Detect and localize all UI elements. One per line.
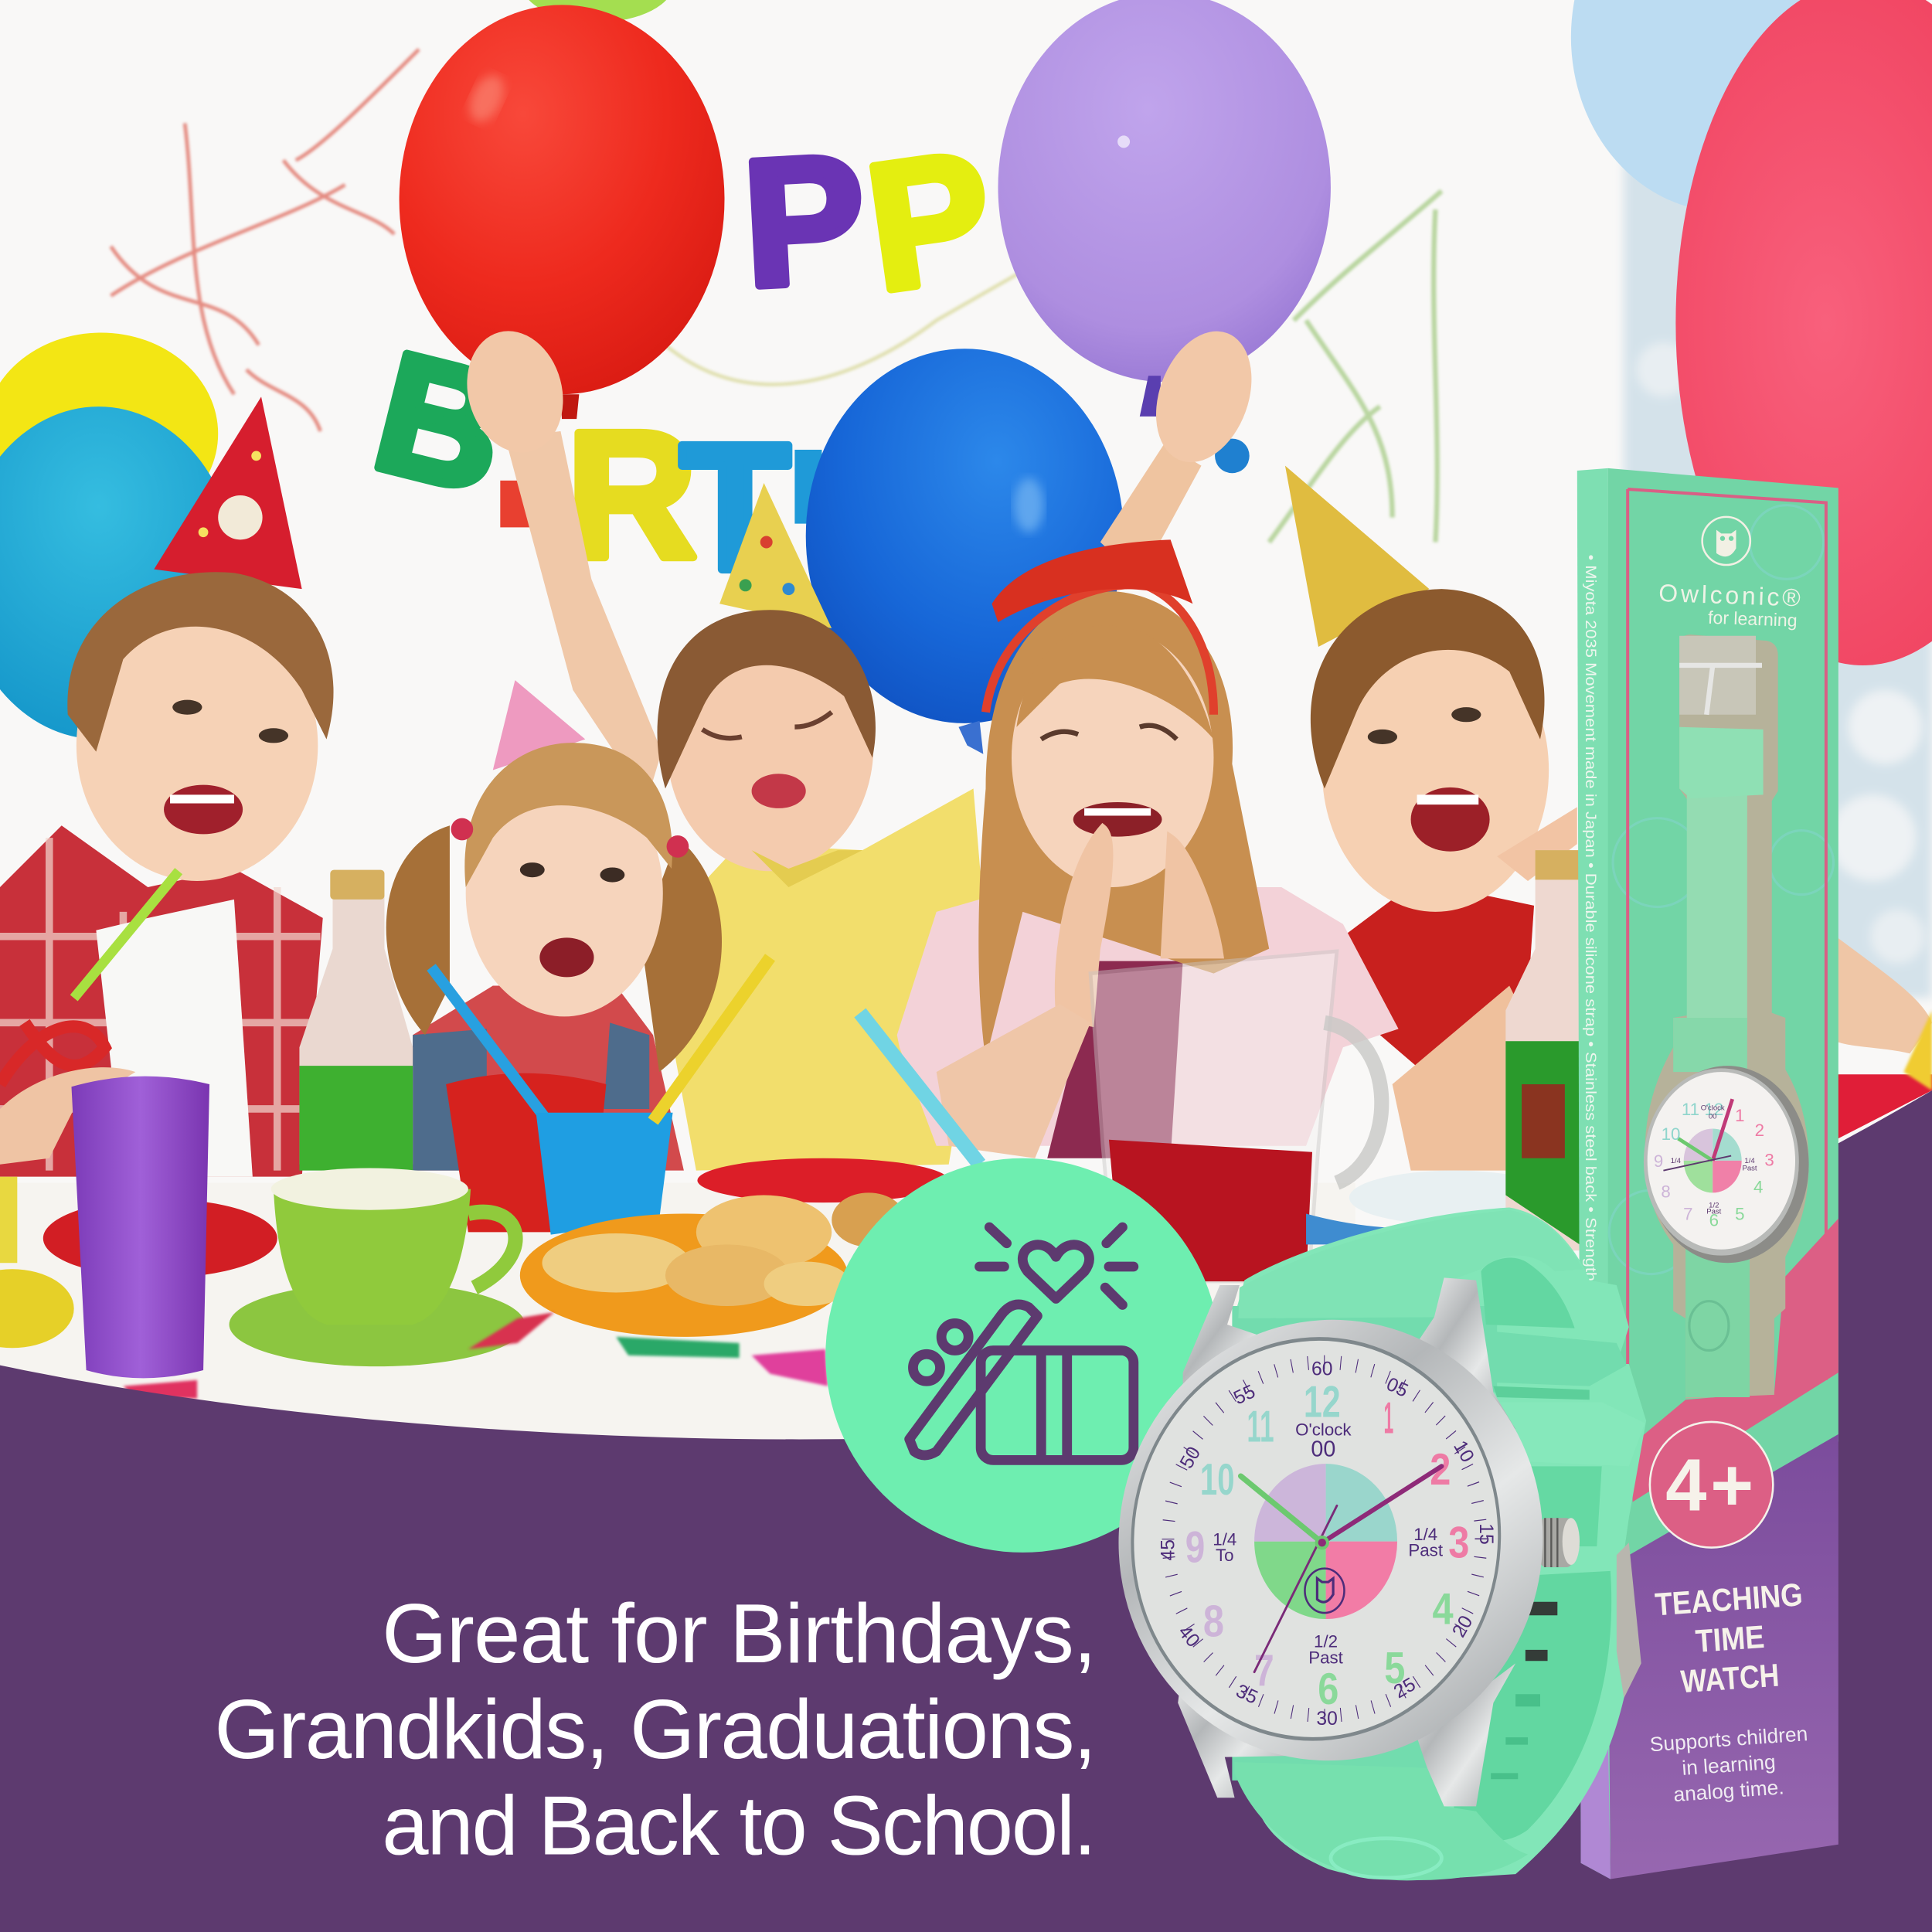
faint pattern — [1609, 505, 1833, 1274]
photo background: party room wall — [0, 0, 1932, 1380]
straw: green — [74, 871, 179, 998]
balloon letters HAPPY BIRTHDAY: R — [566, 395, 697, 596]
spine lower purple — [1581, 1725, 1611, 1879]
orange plate with cookies — [520, 1192, 906, 1337]
balloon: blue — [806, 349, 1124, 754]
red plate edge right — [1836, 1074, 1932, 1140]
red plate at back — [697, 1158, 949, 1202]
star decoration — [1903, 1010, 1932, 1090]
minute numbers: 20 — [1448, 1612, 1478, 1641]
straw: blue left — [431, 968, 622, 1219]
small watch in box: Past — [1706, 1207, 1722, 1216]
minute numbers — [1158, 1359, 1496, 1730]
small watch in box: 00 — [1709, 1113, 1717, 1121]
kid: girl with crown — [897, 539, 1399, 1158]
box title: TEACHING — [1654, 1576, 1804, 1622]
balloon: lavender — [998, 0, 1331, 417]
fist left — [454, 320, 577, 464]
green saucer — [230, 1283, 525, 1366]
minute numbers: 10 — [1449, 1437, 1478, 1466]
quadrant disc — [1254, 1464, 1397, 1619]
box title: WATCH — [1679, 1657, 1781, 1699]
hour numbers: 11 — [1247, 1402, 1274, 1451]
small watch in box: 1/2 — [1709, 1202, 1719, 1210]
purple wave background — [0, 1090, 1932, 1932]
kid: left girl with pigtails — [386, 743, 722, 1171]
small watch in box: 10 — [1662, 1124, 1680, 1144]
dial — [1114, 1323, 1518, 1755]
hour numbers: 8 — [1203, 1597, 1224, 1646]
kid: right boy in red shirt — [1311, 589, 1932, 1171]
dial labels: O'clock — [1295, 1420, 1352, 1439]
glass jug with red juice — [1090, 951, 1382, 1281]
mint circle with gift icon — [825, 1158, 1219, 1553]
small strap — [1673, 636, 1764, 1397]
hour numbers: 2 — [1430, 1445, 1451, 1495]
small watch in box: 2 — [1755, 1121, 1764, 1140]
small watch in box: 8 — [1661, 1182, 1671, 1202]
small watch in box: Past — [1742, 1165, 1757, 1173]
small watch in box — [1644, 1066, 1809, 1263]
cup at right — [1306, 1171, 1559, 1244]
arm of right hand girl raised — [1100, 444, 1202, 579]
dial labels: 1/4 — [1413, 1525, 1437, 1544]
headline: Grandkids, Graduations, — [214, 1682, 1097, 1776]
minute numbers: 45 — [1158, 1539, 1179, 1560]
small watch in box: 11 — [1682, 1100, 1699, 1119]
hour numbers: 9 — [1185, 1523, 1205, 1573]
box title: TIME — [1694, 1618, 1766, 1659]
crown — [1532, 1518, 1580, 1567]
watch lugs — [1178, 1277, 1515, 1806]
buckle — [1617, 1543, 1641, 1698]
balloon: light blue top right — [1571, 0, 1879, 212]
box description: Supports children — [1649, 1722, 1808, 1756]
headline: and Back to School. — [382, 1779, 1097, 1872]
4+ badge: 4+ — [1665, 1444, 1757, 1527]
box brand text: Owlconic® — [1658, 579, 1804, 612]
hour numbers: 12 — [1304, 1378, 1341, 1427]
hour numbers: 7 — [1254, 1646, 1274, 1696]
product box — [1577, 468, 1838, 1879]
small watch in box: 7 — [1683, 1204, 1693, 1223]
party hat: right boy — [1285, 466, 1429, 647]
minute numbers: 30 — [1316, 1709, 1338, 1730]
glass bottle right — [1505, 850, 1580, 1250]
spine text: • Miyota 2035 Movement made in Japan • Durable silicone strap • Stainless steel back • Strength — [1582, 554, 1598, 1281]
box description: analog time. — [1672, 1775, 1784, 1806]
balloon: big pink red — [1675, 0, 1932, 665]
balloon letters HAPPY BIRTHDAY — [359, 114, 1250, 608]
balloon: green top — [521, 0, 674, 22]
headline: Great for Birthdays, — [382, 1587, 1097, 1680]
hour numbers: 1 — [1383, 1393, 1393, 1443]
small watch in box: O'clock — [1701, 1104, 1725, 1113]
dial labels: 1/4 — [1213, 1529, 1236, 1549]
dial labels: 00 — [1311, 1437, 1335, 1462]
hour numbers: 4 — [1432, 1584, 1454, 1634]
minute numbers: 50 — [1176, 1444, 1205, 1472]
minute ticks — [1168, 1362, 1481, 1716]
minute numbers: 60 — [1311, 1359, 1333, 1379]
dial labels — [1213, 1420, 1444, 1667]
party hat: left girl — [493, 680, 585, 770]
box sub brand: for learning — [1708, 607, 1798, 631]
window cutout — [1645, 634, 1809, 1399]
yellow plate left — [0, 1269, 74, 1348]
balloon: teal — [0, 406, 236, 740]
pink diagonal band — [1633, 1219, 1838, 1502]
minute numbers: 05 — [1383, 1374, 1411, 1402]
box spine — [1577, 468, 1611, 1879]
owl logo on dial — [1304, 1569, 1344, 1613]
minute numbers: 55 — [1230, 1381, 1259, 1409]
hour numbers: 5 — [1384, 1644, 1405, 1693]
confetti on table — [123, 1312, 828, 1399]
dial labels: To — [1216, 1546, 1234, 1565]
headline — [214, 1587, 1097, 1872]
hand of left boy — [0, 1067, 135, 1165]
fist right — [1139, 318, 1269, 475]
box description: in learning — [1681, 1750, 1777, 1780]
balloon letters HAPPY BIRTHDAY: P — [856, 114, 1003, 329]
dial labels: 1/2 — [1314, 1632, 1338, 1651]
box logo — [1702, 517, 1750, 565]
dial labels: Past — [1408, 1541, 1444, 1560]
purple cup — [71, 1077, 209, 1378]
minute numbers: 25 — [1390, 1674, 1419, 1702]
icon: open gift with heart — [910, 1227, 1134, 1460]
box front mint — [1608, 468, 1838, 1590]
small watch in box: 6 — [1709, 1210, 1719, 1230]
lace curtain at right — [1624, 160, 1932, 998]
arm of middle boy raised — [505, 431, 662, 801]
balloon letters HAPPY BIRTHDAY: B — [359, 315, 524, 529]
red cup — [446, 1073, 606, 1232]
small watch in box: 12 — [1704, 1100, 1723, 1119]
small watch in box: 4 — [1753, 1177, 1763, 1196]
box description — [1649, 1722, 1808, 1806]
table top — [0, 1183, 1355, 1441]
straw: light blue — [860, 1013, 980, 1165]
dial labels: Past — [1308, 1648, 1344, 1667]
party hat: middle boy — [719, 483, 832, 628]
minute numbers: 40 — [1174, 1621, 1203, 1651]
box title — [1654, 1576, 1804, 1699]
small watch in box: 9 — [1654, 1151, 1663, 1171]
hour numbers — [1185, 1378, 1469, 1714]
balloon: red — [400, 5, 725, 419]
small watch in box: 3 — [1764, 1150, 1774, 1169]
balloon: yellow — [0, 332, 218, 535]
balloon letters HAPPY BIRTHDAY: P — [739, 117, 869, 325]
small watch in box: 1/4 — [1671, 1157, 1682, 1165]
red streamer at left hand — [0, 1022, 105, 1084]
small watch in box: 1 — [1735, 1106, 1744, 1125]
purple bottom panel — [1608, 1434, 1838, 1879]
bezel — [1090, 1292, 1571, 1788]
main watch — [1090, 1207, 1646, 1880]
minute numbers: 35 — [1233, 1681, 1260, 1709]
kid: left boy in plaid shirt — [0, 572, 334, 1177]
small watch in box: 5 — [1735, 1204, 1744, 1223]
party hat: left boy — [154, 396, 302, 589]
4+ badge — [1650, 1422, 1773, 1548]
balloon letters HAPPY BIRTHDAY: T — [680, 407, 790, 608]
hour numbers: 3 — [1448, 1518, 1469, 1567]
hour numbers: 6 — [1318, 1665, 1338, 1714]
straw: yellow — [653, 957, 770, 1121]
hour numbers: 10 — [1200, 1455, 1235, 1505]
minute numbers: 15 — [1475, 1523, 1496, 1545]
strap — [1232, 1207, 1646, 1880]
watch hands — [1241, 1466, 1441, 1672]
blue cup — [536, 1113, 673, 1235]
glass bottle left — [299, 870, 413, 1171]
yellow glass left — [0, 1177, 17, 1263]
small items at left: red plate — [43, 1199, 277, 1277]
small watch in box: 1/4 — [1744, 1157, 1755, 1165]
kid: middle boy in yellow shirt — [653, 610, 986, 1171]
streamers on wall — [111, 49, 1441, 543]
pink frame lines — [1628, 489, 1826, 1441]
green cup — [271, 1168, 515, 1325]
